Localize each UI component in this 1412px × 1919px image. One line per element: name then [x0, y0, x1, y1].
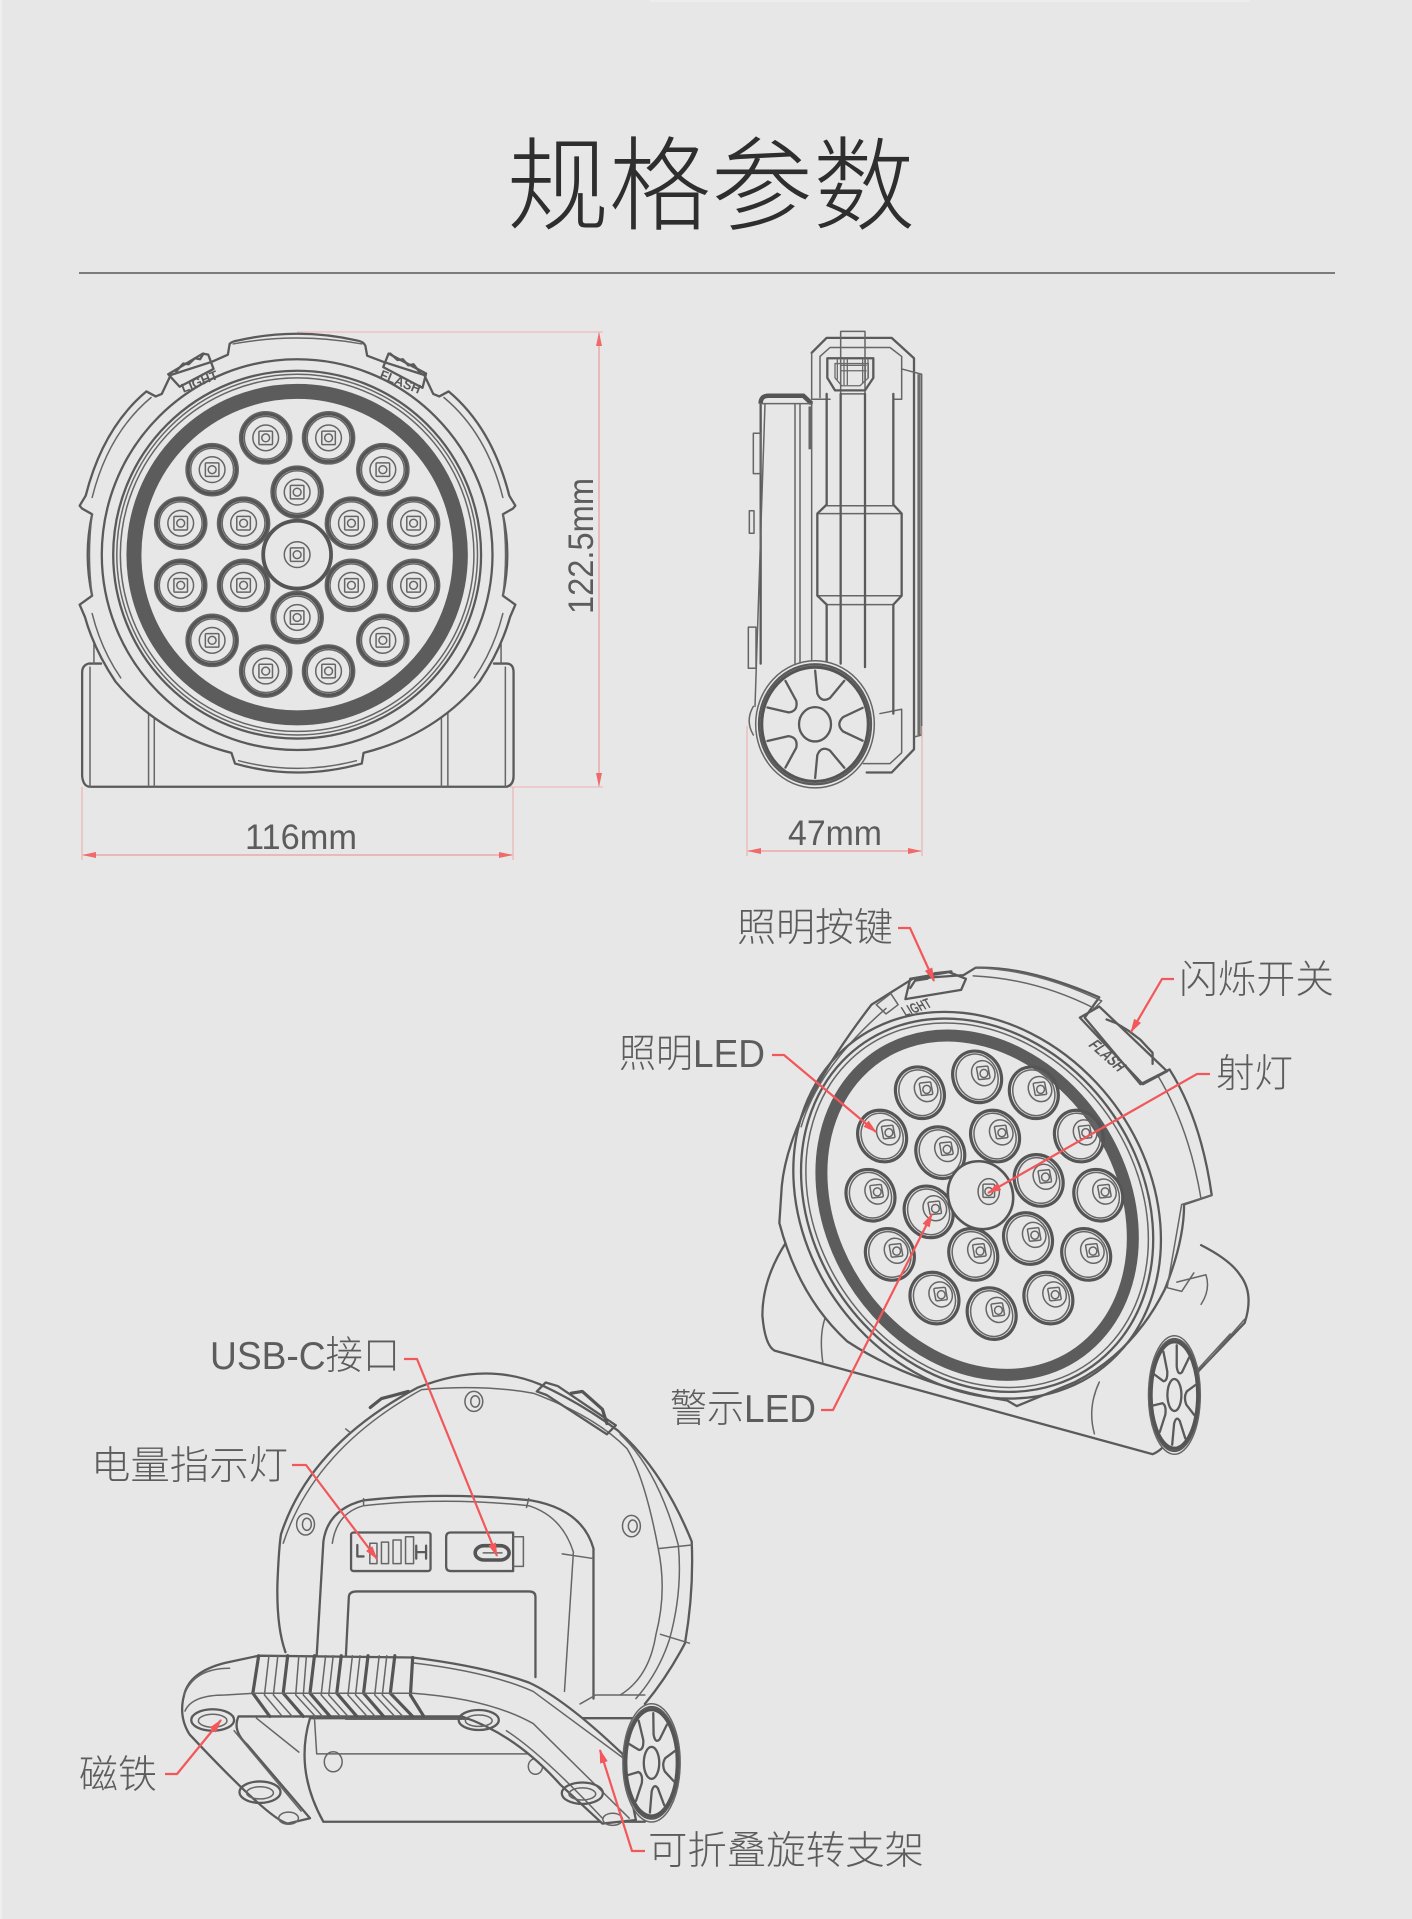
center spotlight: [944, 1159, 1017, 1232]
LED array: [842, 1049, 1127, 1342]
callout: lighting LED: 照明LED: [619, 1033, 765, 1076]
button: light: LIGHT: [179, 367, 220, 396]
lens rings: [102, 359, 492, 750]
side wheel: [756, 661, 874, 788]
rear view drawing: [182, 1374, 692, 1826]
callout: folding stand: 可折叠旋转支架: [648, 1830, 924, 1873]
back housing: [748, 396, 812, 735]
center spotlight: [263, 521, 331, 589]
LED array: [155, 412, 440, 697]
button: flash: [1080, 1007, 1167, 1084]
button: flash: FLASH: [1084, 1038, 1130, 1074]
housing outline: [779, 968, 1212, 1406]
button: light: [168, 354, 220, 396]
title divider: [79, 272, 1335, 274]
wheel: [621, 1700, 682, 1826]
rear panel: [317, 1496, 593, 1699]
callout: battery indicator: [91, 1445, 377, 1559]
dimension: depth 47mm: 47mm: [788, 814, 882, 853]
button: flash: [378, 354, 426, 397]
battery indicator: [351, 1532, 431, 1571]
button: light: [876, 971, 966, 1020]
housing outline: [80, 334, 515, 772]
title: 规格参数: [507, 130, 915, 244]
perspective front view drawing: [762, 968, 1249, 1460]
top edge highlight: [650, 0, 1250, 2]
knob on top: [827, 358, 873, 390]
callout: flash switch: [1131, 959, 1334, 1032]
callout: warning LED: 警示LED: [670, 1388, 816, 1431]
dimension: height 122.5mm: [297, 332, 603, 787]
dimension: width 116mm: [82, 787, 513, 860]
dimension: depth 47mm: [747, 726, 922, 856]
folding handle: [182, 1656, 636, 1825]
handle grip ridges: [253, 1656, 424, 1716]
callout: USB-C port: USB-C接口: [210, 1335, 400, 1378]
dimension: width 116mm: 116mm: [245, 818, 357, 857]
lower cylinder: [305, 1695, 645, 1822]
dimension: height 122.5mm: 122.5mm: [562, 478, 601, 614]
callout: magnet: 磁铁: [79, 1754, 157, 1797]
front view drawing: [80, 334, 515, 787]
callout: warning LED: [670, 1214, 932, 1431]
side view drawing: [748, 331, 922, 788]
stand wheel: [1146, 1330, 1203, 1460]
callout: light button: [737, 907, 934, 981]
callout: flash switch: 闪烁开关: [1179, 959, 1334, 1002]
callout: spotlight: [988, 1053, 1293, 1193]
lens rings: [779, 994, 1175, 1417]
callout: light button: 照明按键: [737, 907, 893, 950]
callout: spotlight: 射灯: [1216, 1053, 1293, 1096]
button: light: LIGHT: [899, 996, 935, 1020]
callout: USB-C port: [210, 1335, 497, 1556]
main body: [812, 331, 922, 772]
callout: magnet: [79, 1720, 221, 1797]
rear housing: [277, 1374, 692, 1704]
left edge highlight: [0, 0, 2, 1919]
callout: folding stand: [600, 1750, 924, 1873]
callout: battery indicator: 电量指示灯: [91, 1445, 288, 1488]
button: flash: FLASH: [378, 367, 423, 397]
stand: [762, 1241, 1249, 1454]
side buttons: [346, 1382, 616, 1434]
callout: lighting LED: [619, 1033, 876, 1132]
USB-C port: [446, 1532, 523, 1571]
stand: [82, 644, 514, 787]
